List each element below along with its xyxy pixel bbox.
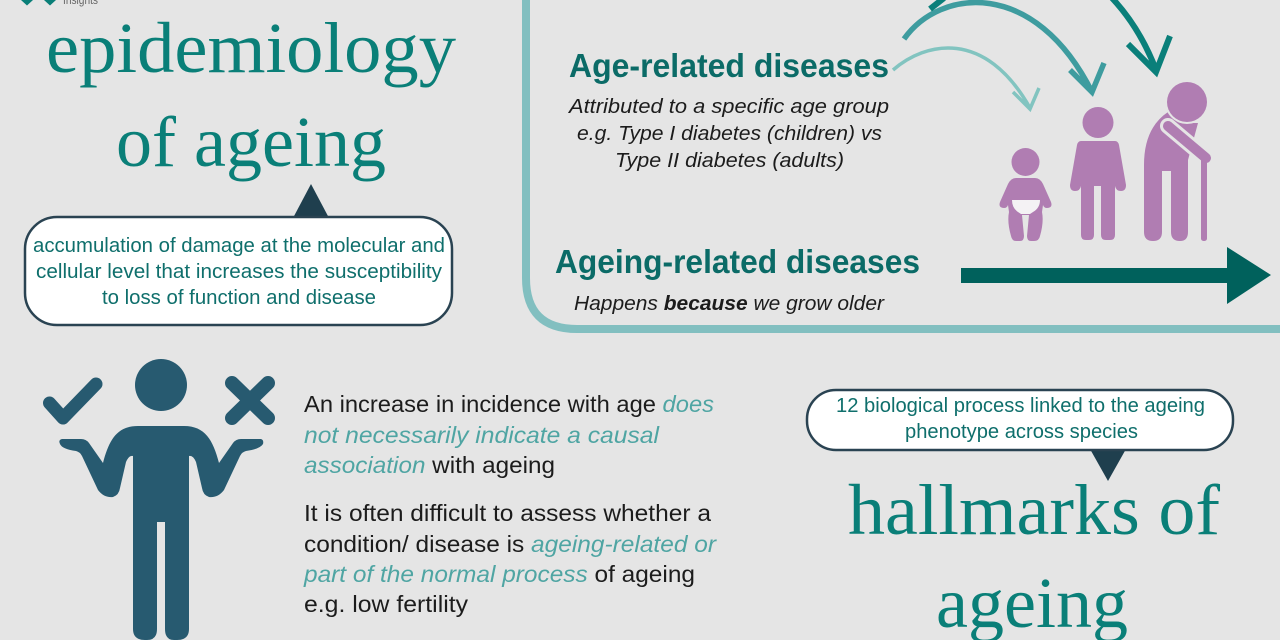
arrow: to adult bbox=[904, 3, 1104, 92]
callout: hallmarks definition: phenotype across species bbox=[905, 421, 1138, 443]
text: ageing-related description: Happens because we grow older bbox=[574, 293, 885, 315]
text: age-related description bbox=[568, 96, 889, 172]
arrow: to older adult bbox=[930, 0, 1170, 72]
title: epidemiology of ageing bbox=[46, 8, 456, 182]
text block: causal association bbox=[304, 391, 715, 478]
callout: definition of ageing bbox=[25, 184, 452, 325]
heading: age-related diseases: Age-related diseases bbox=[569, 47, 889, 84]
text: age-related description: Attributed to a specific age group bbox=[568, 96, 889, 118]
heading: ageing-related diseases: Ageing-related diseases bbox=[555, 243, 920, 280]
icon: cross mark bbox=[232, 383, 268, 418]
arrow: to child bbox=[893, 48, 1039, 109]
text: age-related description: e.g. Type I diabetes (children) vs bbox=[577, 123, 882, 145]
text block: causal association: association with ageing bbox=[304, 452, 555, 478]
icon: shrugging person with check and cross bbox=[50, 359, 268, 640]
text block: difficulty of assessment: It is often difficult to assess whether a bbox=[304, 500, 711, 526]
text: age-related description: Type II diabetes (adults) bbox=[615, 150, 844, 172]
icon: older adult with cane bbox=[1144, 80, 1209, 241]
text block: difficulty of assessment: e.g. low fertility bbox=[304, 591, 469, 617]
icon: baby bbox=[1000, 148, 1052, 241]
icon: adult bbox=[1070, 107, 1126, 240]
logo bbox=[21, 0, 98, 7]
panel border bbox=[526, 0, 1280, 329]
callout: definition of ageing: to loss of function and disease bbox=[102, 287, 376, 309]
callout: hallmarks definition: 12 biological process linked to the ageing bbox=[836, 395, 1205, 417]
callout: definition of ageing: cellular level that increases the susceptibility bbox=[36, 261, 442, 283]
panel: age-related vs ageing-related diseases bbox=[526, 0, 1280, 329]
text block: difficulty of assessment: condition/ disease is ageing-related or bbox=[304, 531, 717, 557]
title: hallmarks of ageing: hallmarks of bbox=[848, 470, 1220, 550]
callout: definition of ageing: accumulation of damage at the molecular and bbox=[33, 235, 445, 257]
text block: causal association: not necessarily indicate a causal bbox=[304, 422, 660, 448]
text block: causal association: An increase in incidence with age does bbox=[304, 391, 715, 417]
title: epidemiology of ageing: of ageing bbox=[116, 102, 386, 182]
title: epidemiology of ageing: epidemiology bbox=[46, 8, 456, 88]
text block: difficulty of assessment: part of the normal process of ageing bbox=[303, 561, 695, 587]
icon: check mark bbox=[50, 384, 96, 418]
arrow: timeline bbox=[961, 247, 1271, 304]
title: hallmarks of ageing bbox=[848, 470, 1220, 640]
text block: difficulty of assessment bbox=[303, 500, 717, 617]
callout: hallmarks definition bbox=[807, 390, 1233, 481]
